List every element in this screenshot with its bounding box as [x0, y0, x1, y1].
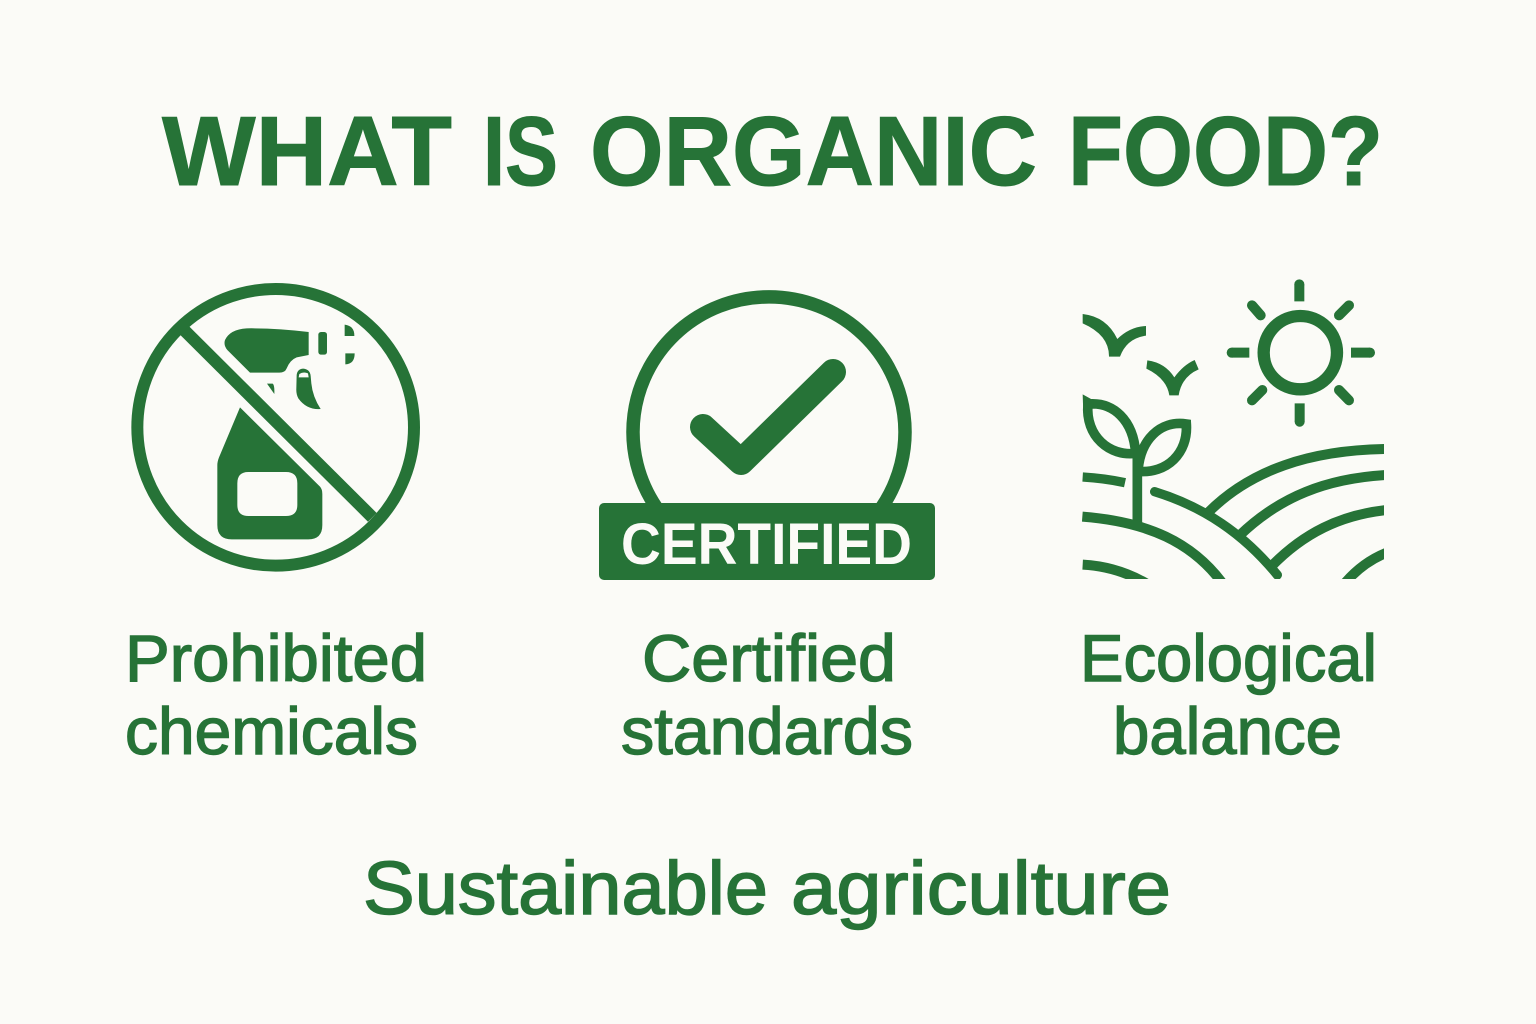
- banner text: CERTIFIED: [621, 512, 912, 577]
- label: certified standards: [621, 621, 913, 768]
- birds: [1083, 314, 1146, 357]
- title: [162, 96, 1383, 206]
- label: ecological balance: balance: [1113, 694, 1342, 768]
- label: ecological balance: [1080, 621, 1377, 768]
- badge ring: [633, 297, 905, 507]
- tagline: sustainable agriculture: agriculture: [791, 846, 1171, 930]
- icon: prohibited spray bottle: [137, 289, 414, 566]
- panel: certified standards: [599, 297, 935, 768]
- label: prohibited chemicals: Prohibited: [125, 621, 427, 695]
- icon: certified badge: [599, 297, 935, 580]
- hills: [1082, 449, 1387, 587]
- check mark: [703, 372, 833, 462]
- panel: prohibited chemicals: [125, 289, 427, 768]
- sun: [1232, 284, 1370, 422]
- label: prohibited chemicals: [125, 621, 427, 768]
- label: certified standards: Certified: [642, 621, 896, 695]
- icon: landscape with sun, birds and sprout: [1082, 284, 1387, 587]
- panel: ecological balance: [1080, 284, 1387, 768]
- title: FOOD?: [1068, 96, 1383, 206]
- tagline: sustainable agriculture: Sustainable: [363, 846, 768, 930]
- title: IS: [483, 96, 558, 206]
- certified banner: [599, 503, 935, 580]
- title: ORGANIC: [590, 96, 1037, 206]
- title: WHAT: [162, 96, 452, 206]
- tagline: sustainable agriculture: [363, 846, 1171, 930]
- label: certified standards: standards: [621, 694, 913, 768]
- label: prohibited chemicals: chemicals: [125, 694, 418, 768]
- label: ecological balance: Ecological: [1080, 621, 1377, 695]
- sprout: [1083, 394, 1191, 523]
